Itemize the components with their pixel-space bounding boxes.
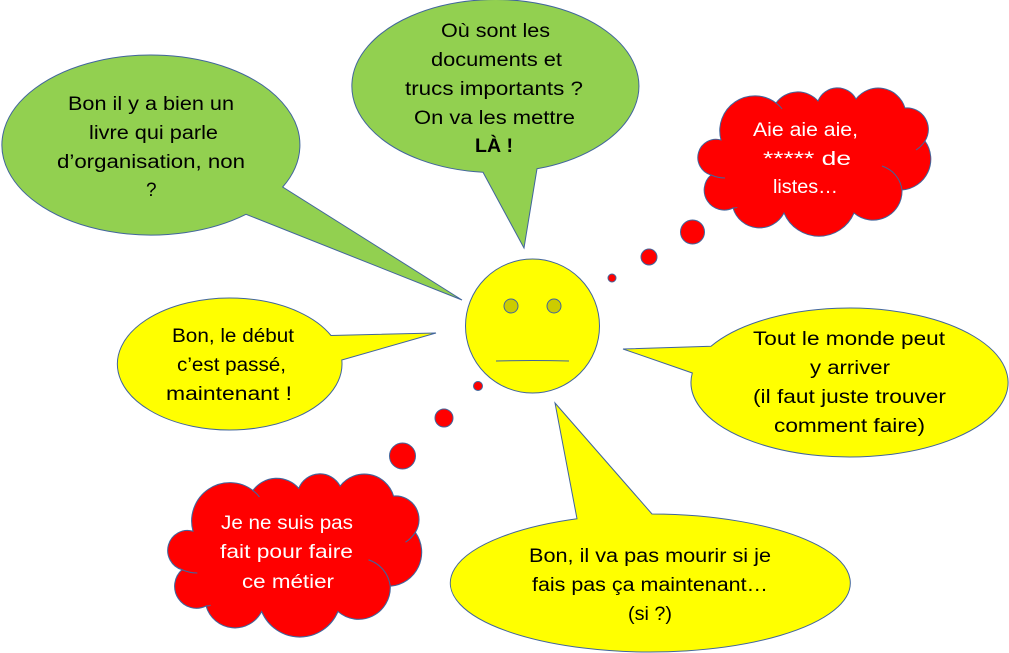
speech bubble: tout le monde peut y arriver: y arriver [810, 358, 891, 379]
speech bubble: il va pas mourir: (si ?) [628, 604, 672, 625]
speech bubble: livre sur l'organisation: ? [146, 180, 157, 201]
thought cloud: listes: ***** de [763, 149, 851, 170]
thought cloud: listes: Aie aie aie, [753, 120, 858, 141]
thought cloud: listes: listes… [773, 177, 838, 198]
speech bubble: il va pas mourir [450, 403, 850, 652]
speech bubble: tout le monde peut y arriver: comment faire) [774, 416, 925, 437]
smiley face [466, 259, 600, 393]
icon: right eye [547, 299, 561, 313]
speech bubble: le début est passé: c’est passé, [177, 355, 286, 376]
speech bubble: livre sur l'organisation: d’organisation, non [57, 152, 245, 173]
speech bubble: documents importants [352, 0, 639, 248]
speech bubble: documents importants: trucs importants ? [405, 79, 583, 100]
speech bubble: documents importants: LÀ ! [475, 135, 513, 157]
speech bubble: livre sur l'organisation: Bon il y a bien un [68, 94, 234, 115]
speech bubble: tout le monde peut y arriver: (il faut juste trouver [753, 387, 947, 408]
thought cloud: pas fait pour ce métier: ce métier [242, 572, 335, 593]
thought cloud: pas fait pour ce métier: Je ne suis pas [221, 513, 353, 534]
thought dots: lower left [390, 382, 482, 469]
speech bubble: tout le monde peut y arriver: Tout le monde peut [753, 329, 946, 350]
thought cloud: listes [698, 88, 931, 236]
speech bubble: le début est passé: maintenant ! [166, 384, 292, 405]
speech bubble: documents importants: documents et [431, 50, 563, 71]
speech bubble: le début est passé: Bon, le début [172, 326, 295, 347]
speech bubble: il va pas mourir: fais pas ça maintenant… [532, 575, 768, 596]
icon: mouth [496, 360, 569, 362]
speech bubble: il va pas mourir: Bon, il va pas mourir si je [529, 546, 771, 567]
speech bubble: documents importants: Où sont les [441, 21, 550, 42]
thought dots: upper right [608, 220, 704, 282]
speech bubble: documents importants: On va les mettre [414, 108, 575, 129]
speech bubble: le début est passé [117, 298, 436, 430]
speech bubble: livre sur l'organisation [2, 55, 462, 300]
thought cloud: pas fait pour ce métier [168, 474, 422, 637]
speech bubble: tout le monde peut y arriver [623, 308, 1008, 457]
speech bubble: livre sur l'organisation: livre qui parle [89, 123, 218, 144]
thought cloud: pas fait pour ce métier: fait pour faire [220, 542, 353, 563]
icon: left eye [504, 299, 518, 313]
